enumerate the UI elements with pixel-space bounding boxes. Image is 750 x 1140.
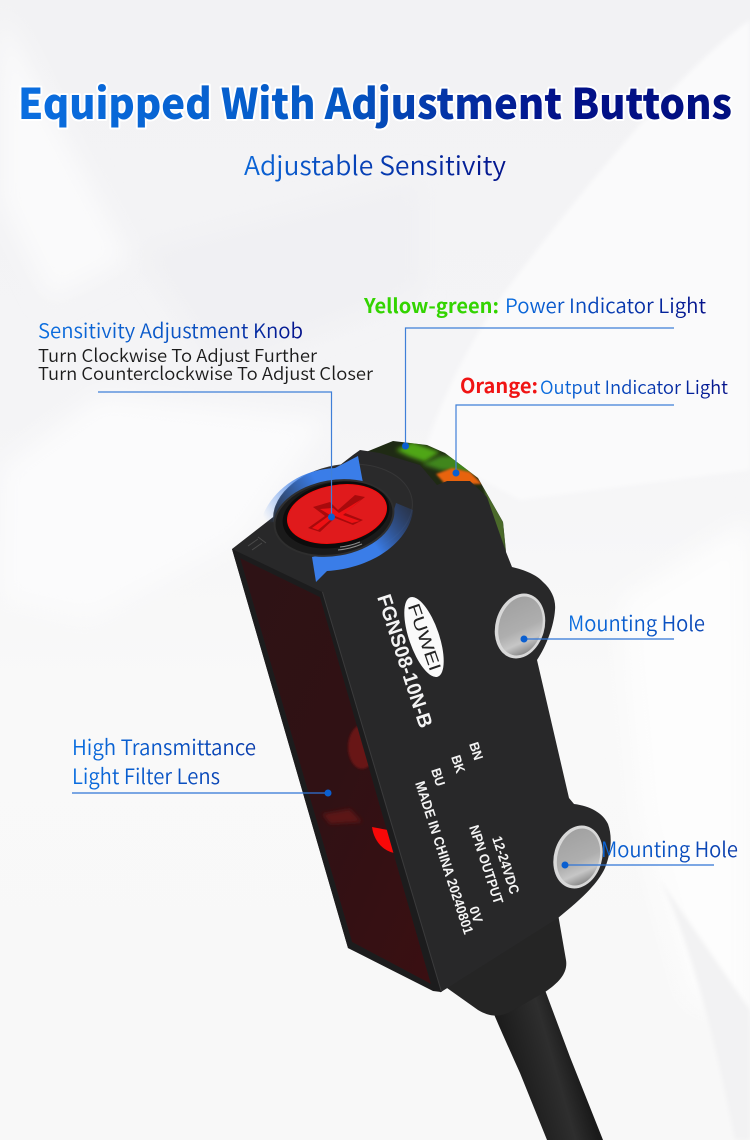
wire labels: BK	[448, 753, 468, 775]
callout: sensitivity adjustment knob: Turn Clockwise To Adjust Further	[38, 342, 317, 368]
light filter lens	[240, 558, 431, 984]
top logo mark	[248, 537, 266, 550]
knob black ring	[268, 471, 400, 565]
callout: power indicator	[363, 290, 707, 450]
callout: sensitivity adjustment knob: Turn Counterclockwise To Adjust Closer	[38, 360, 373, 386]
title: Equipped With Adjustment Buttons	[18, 71, 732, 132]
callout: mounting hole upper: Mounting Hole	[568, 608, 705, 638]
callout: light filter lens: Light Filter Lens	[72, 761, 220, 791]
cable collar	[441, 914, 566, 1016]
callout: light filter lens	[72, 732, 332, 796]
mounting hole lower	[546, 820, 610, 894]
brand oval: FUWEI	[404, 601, 445, 673]
ring highlight	[338, 542, 362, 550]
callout: power indicator: Power Indicator Light	[505, 290, 707, 319]
callout: mounting hole upper	[520, 608, 705, 642]
lens frame	[232, 549, 441, 992]
callout: output indicator: Orange:	[460, 370, 538, 399]
callout: sensitivity adjustment knob	[38, 315, 373, 520]
indicator domes	[366, 441, 506, 552]
sensor product illustration	[232, 441, 611, 1140]
blue rotation arrow top	[260, 456, 363, 523]
callout: mounting hole lower: Mounting Hole	[601, 834, 738, 864]
wire labels: BU	[428, 766, 448, 788]
callout: sensitivity adjustment knob: Sensitivity Adjustment Knob	[38, 315, 303, 344]
wire labels	[428, 740, 486, 788]
outer ring on top face	[266, 454, 420, 568]
blue rotation arrow bottom	[312, 503, 413, 582]
red adjustment knob	[283, 477, 391, 551]
side ridge	[322, 592, 441, 992]
callout: output indicator	[452, 370, 728, 476]
callout: power indicator: Yellow-green:	[363, 290, 499, 319]
wire labels: BN	[466, 740, 486, 762]
origin and date code: MADE IN CHINA 20240801	[412, 779, 477, 936]
subtitle: Adjustable Sensitivity	[244, 146, 506, 183]
cross slot	[308, 495, 365, 532]
callout: output indicator: Output Indicator Light	[540, 374, 728, 400]
brand oval	[396, 592, 452, 682]
mounting hole upper	[487, 588, 553, 664]
model number: FGNS08-10N-B	[372, 592, 436, 731]
cable	[493, 990, 603, 1140]
sensor body	[232, 450, 611, 992]
ground: 0V	[466, 904, 486, 925]
output type: NPN OUTPUT	[466, 823, 507, 906]
callout: light filter lens: High Transmittance	[72, 732, 256, 762]
callout: mounting hole lower	[562, 834, 738, 868]
voltage: 12-24VDC	[489, 834, 523, 896]
